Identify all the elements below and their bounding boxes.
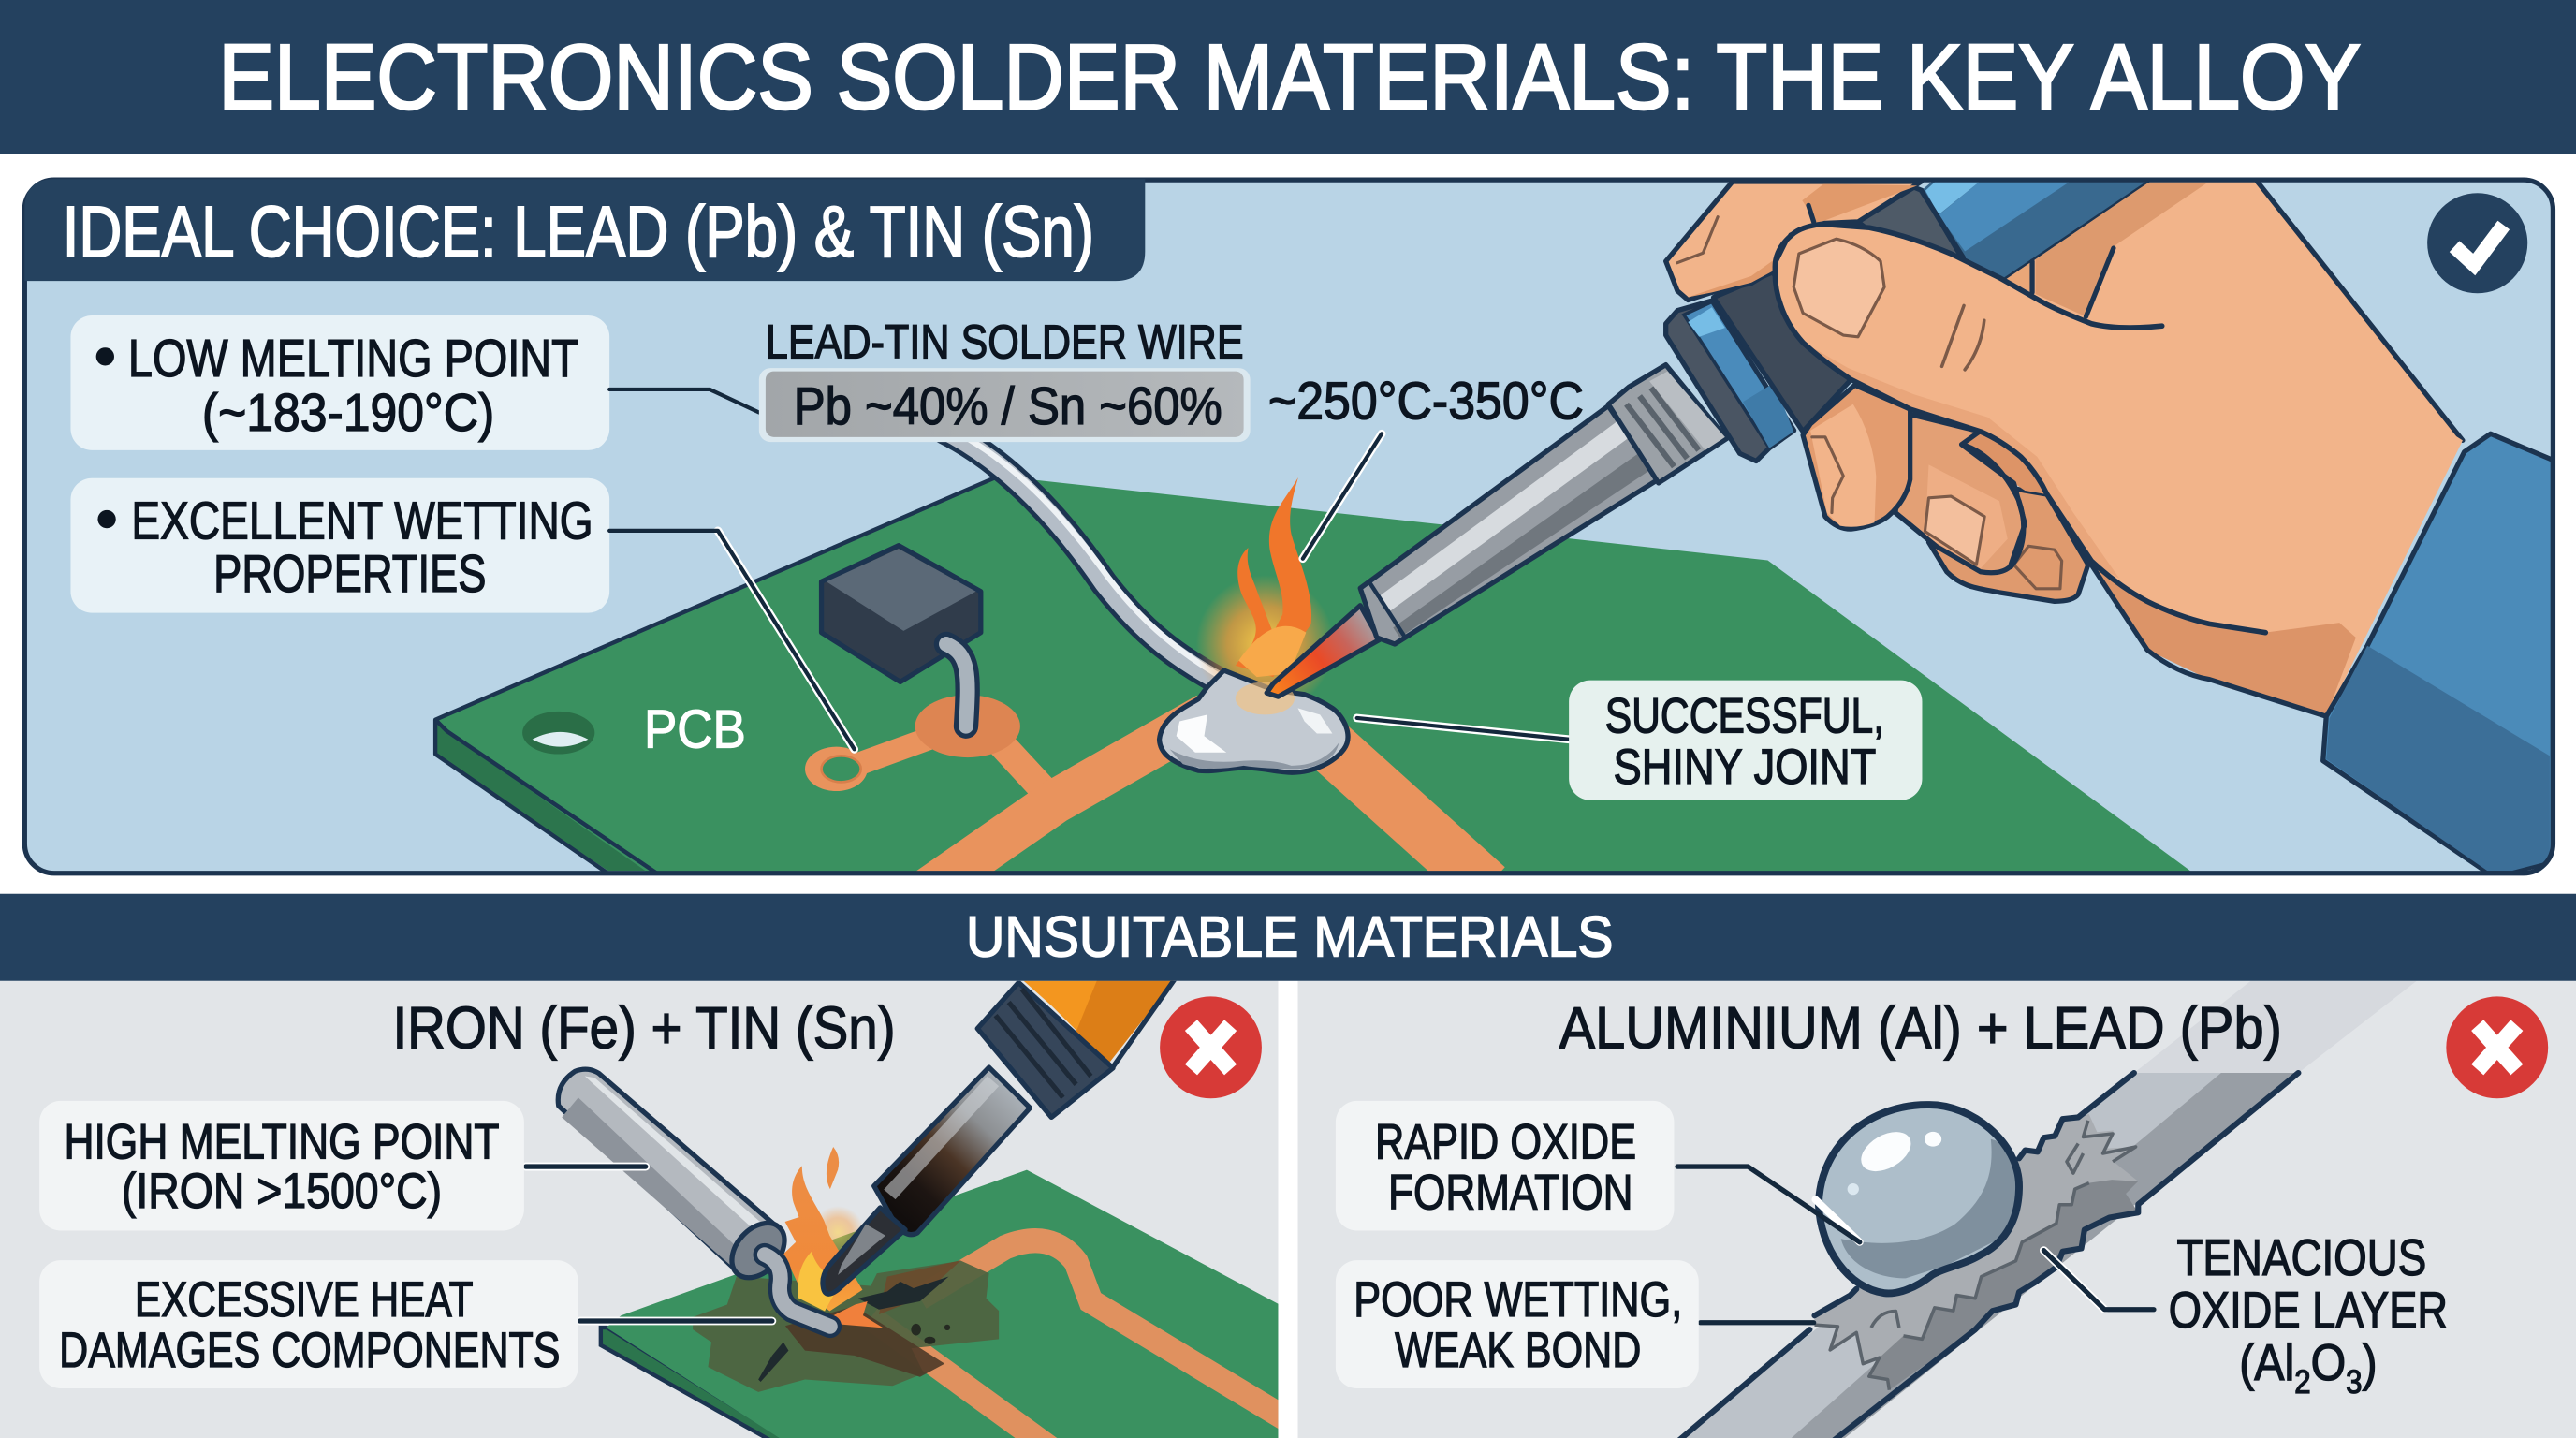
- heading: aluminium lead: ALUMINIUM (Al) + LEAD (Pb): [1559, 996, 2282, 1062]
- label: tenacious oxide layer: O: [2311, 1334, 2346, 1391]
- aluminium strip: [1671, 1073, 2298, 1438]
- callout: high melting point: HIGH MELTING POINT: [64, 1114, 500, 1169]
- callout: high melting point: (IRON >1500°C): [122, 1164, 442, 1219]
- label: tenacious oxide layer: 3: [2346, 1364, 2363, 1401]
- flame: [783, 1147, 884, 1328]
- rod of iron: [558, 1069, 830, 1327]
- callout: poor wetting: [1336, 1260, 1699, 1388]
- callout: poor wetting: POOR WETTING,: [1354, 1272, 1682, 1328]
- lead droplet: [1819, 1105, 2029, 1293]
- label: tenacious oxide layer: OXIDE LAYER: [2169, 1282, 2448, 1339]
- soldering iron: [1266, 182, 2150, 697]
- callout: rapid oxide: FORMATION: [1388, 1166, 1633, 1221]
- oxide layer: [1673, 1073, 2298, 1438]
- copper traces: [805, 695, 1486, 895]
- red cross badge: [1160, 996, 1262, 1098]
- callout: low melting point: [70, 315, 609, 450]
- alloy composition pill: Pb ~40% / Sn ~60%: [794, 376, 1222, 435]
- section banner: unsuitable materials: UNSUITABLE MATERIALS: [966, 904, 1614, 969]
- check badge: [2427, 193, 2527, 293]
- leader: high melting point: [526, 1165, 646, 1169]
- leader: wetting to pad: [609, 531, 855, 749]
- section banner: unsuitable materials: [0, 894, 2576, 981]
- callout: excessive heat: DAMAGES COMPONENTS: [59, 1323, 560, 1378]
- callout: excessive heat: [39, 1260, 578, 1388]
- callout: shiny joint: SHINY JOINT: [1614, 740, 1876, 795]
- thumb and palm: [1775, 224, 2463, 716]
- panel border: [24, 180, 2553, 873]
- panel heading tab: IDEAL CHOICE: LEAD (Pb) & TIN (Sn): [63, 192, 1094, 272]
- callout: rapid oxide: RAPID OXIDE: [1375, 1114, 1636, 1169]
- panel: aluminium + lead: [1298, 981, 2576, 1438]
- damaged PCB: [601, 1170, 1298, 1438]
- panel: iron + tin: [0, 979, 1298, 1438]
- title banner: [0, 0, 2576, 154]
- callout: shiny joint: [1569, 681, 1922, 800]
- burn mark: [693, 1260, 999, 1392]
- callout: low melting point: (~183-190°C): [202, 383, 494, 442]
- callout: high melting point: [39, 1101, 524, 1231]
- solder wire label: LEAD-TIN SOLDER WIRE: [766, 315, 1244, 369]
- illustration: soldering scene: [435, 182, 2553, 895]
- callout: excessive heat: EXCESSIVE HEAT: [135, 1272, 473, 1328]
- label: tenacious oxide layer: ): [2363, 1334, 2378, 1391]
- label: tenacious oxide layer: 2: [2294, 1364, 2311, 1401]
- PCB label: PCB: [644, 700, 746, 760]
- finger three: [1928, 477, 2088, 601]
- heading: iron tin: IRON (Fe) + TIN (Sn): [392, 996, 896, 1062]
- faded strip continuation: [2134, 981, 2417, 1073]
- callout: rapid oxide: [1336, 1101, 1674, 1231]
- leader: temperature: [1303, 433, 1382, 559]
- panel heading tab: [24, 179, 1145, 281]
- title banner: ELECTRONICS SOLDER MATERIALS: THE KEY ALLOY: [218, 25, 2361, 128]
- mounting hole: [522, 712, 594, 755]
- callout: excellent wetting: PROPERTIES: [213, 544, 487, 603]
- finger one: [1803, 385, 1910, 529]
- component chip: [822, 546, 981, 726]
- sleeve cuff: [2323, 433, 2553, 873]
- leader: poor wetting: [1701, 1321, 1814, 1324]
- callout: excellent wetting: [70, 478, 609, 613]
- solder wire: [944, 431, 1224, 683]
- label: tenacious oxide layer: (Al: [2239, 1334, 2302, 1391]
- PCB board: [435, 478, 2202, 879]
- flame and glow: [1198, 477, 1330, 694]
- solder joint: [1160, 670, 1348, 772]
- red cross badge: [2446, 996, 2548, 1098]
- leader: melting point to wire: [609, 389, 759, 413]
- callout: shiny joint: SUCCESSFUL,: [1605, 689, 1884, 744]
- label: tenacious oxide layer: [2169, 1229, 2448, 1401]
- overheated soldering iron: [823, 979, 1175, 1294]
- panel: ideal choice: [24, 179, 2553, 895]
- hand: [1666, 182, 2463, 716]
- leader: excessive heat: [580, 1319, 772, 1324]
- callout: low melting point: LOW MELTING POINT: [128, 329, 578, 388]
- callout: excellent wetting: EXCELLENT WETTING: [131, 492, 593, 550]
- top fingers: [1666, 182, 1922, 300]
- finger two: [1967, 434, 2044, 494]
- tip temperature label: ~250°C-350°C: [1268, 372, 1584, 431]
- label: tenacious oxide layer: TENACIOUS: [2177, 1229, 2426, 1286]
- callout: poor wetting: WEAK BOND: [1395, 1323, 1641, 1378]
- hand back: [2006, 182, 2463, 716]
- leader: oxide layer: [2043, 1251, 2154, 1310]
- leader: rapid oxide: [1677, 1167, 1860, 1242]
- illustration: overheated joint: [558, 979, 1298, 1438]
- illustration: aluminium strip and droplet: [1671, 981, 2548, 1438]
- leader: joint: [1357, 718, 1569, 740]
